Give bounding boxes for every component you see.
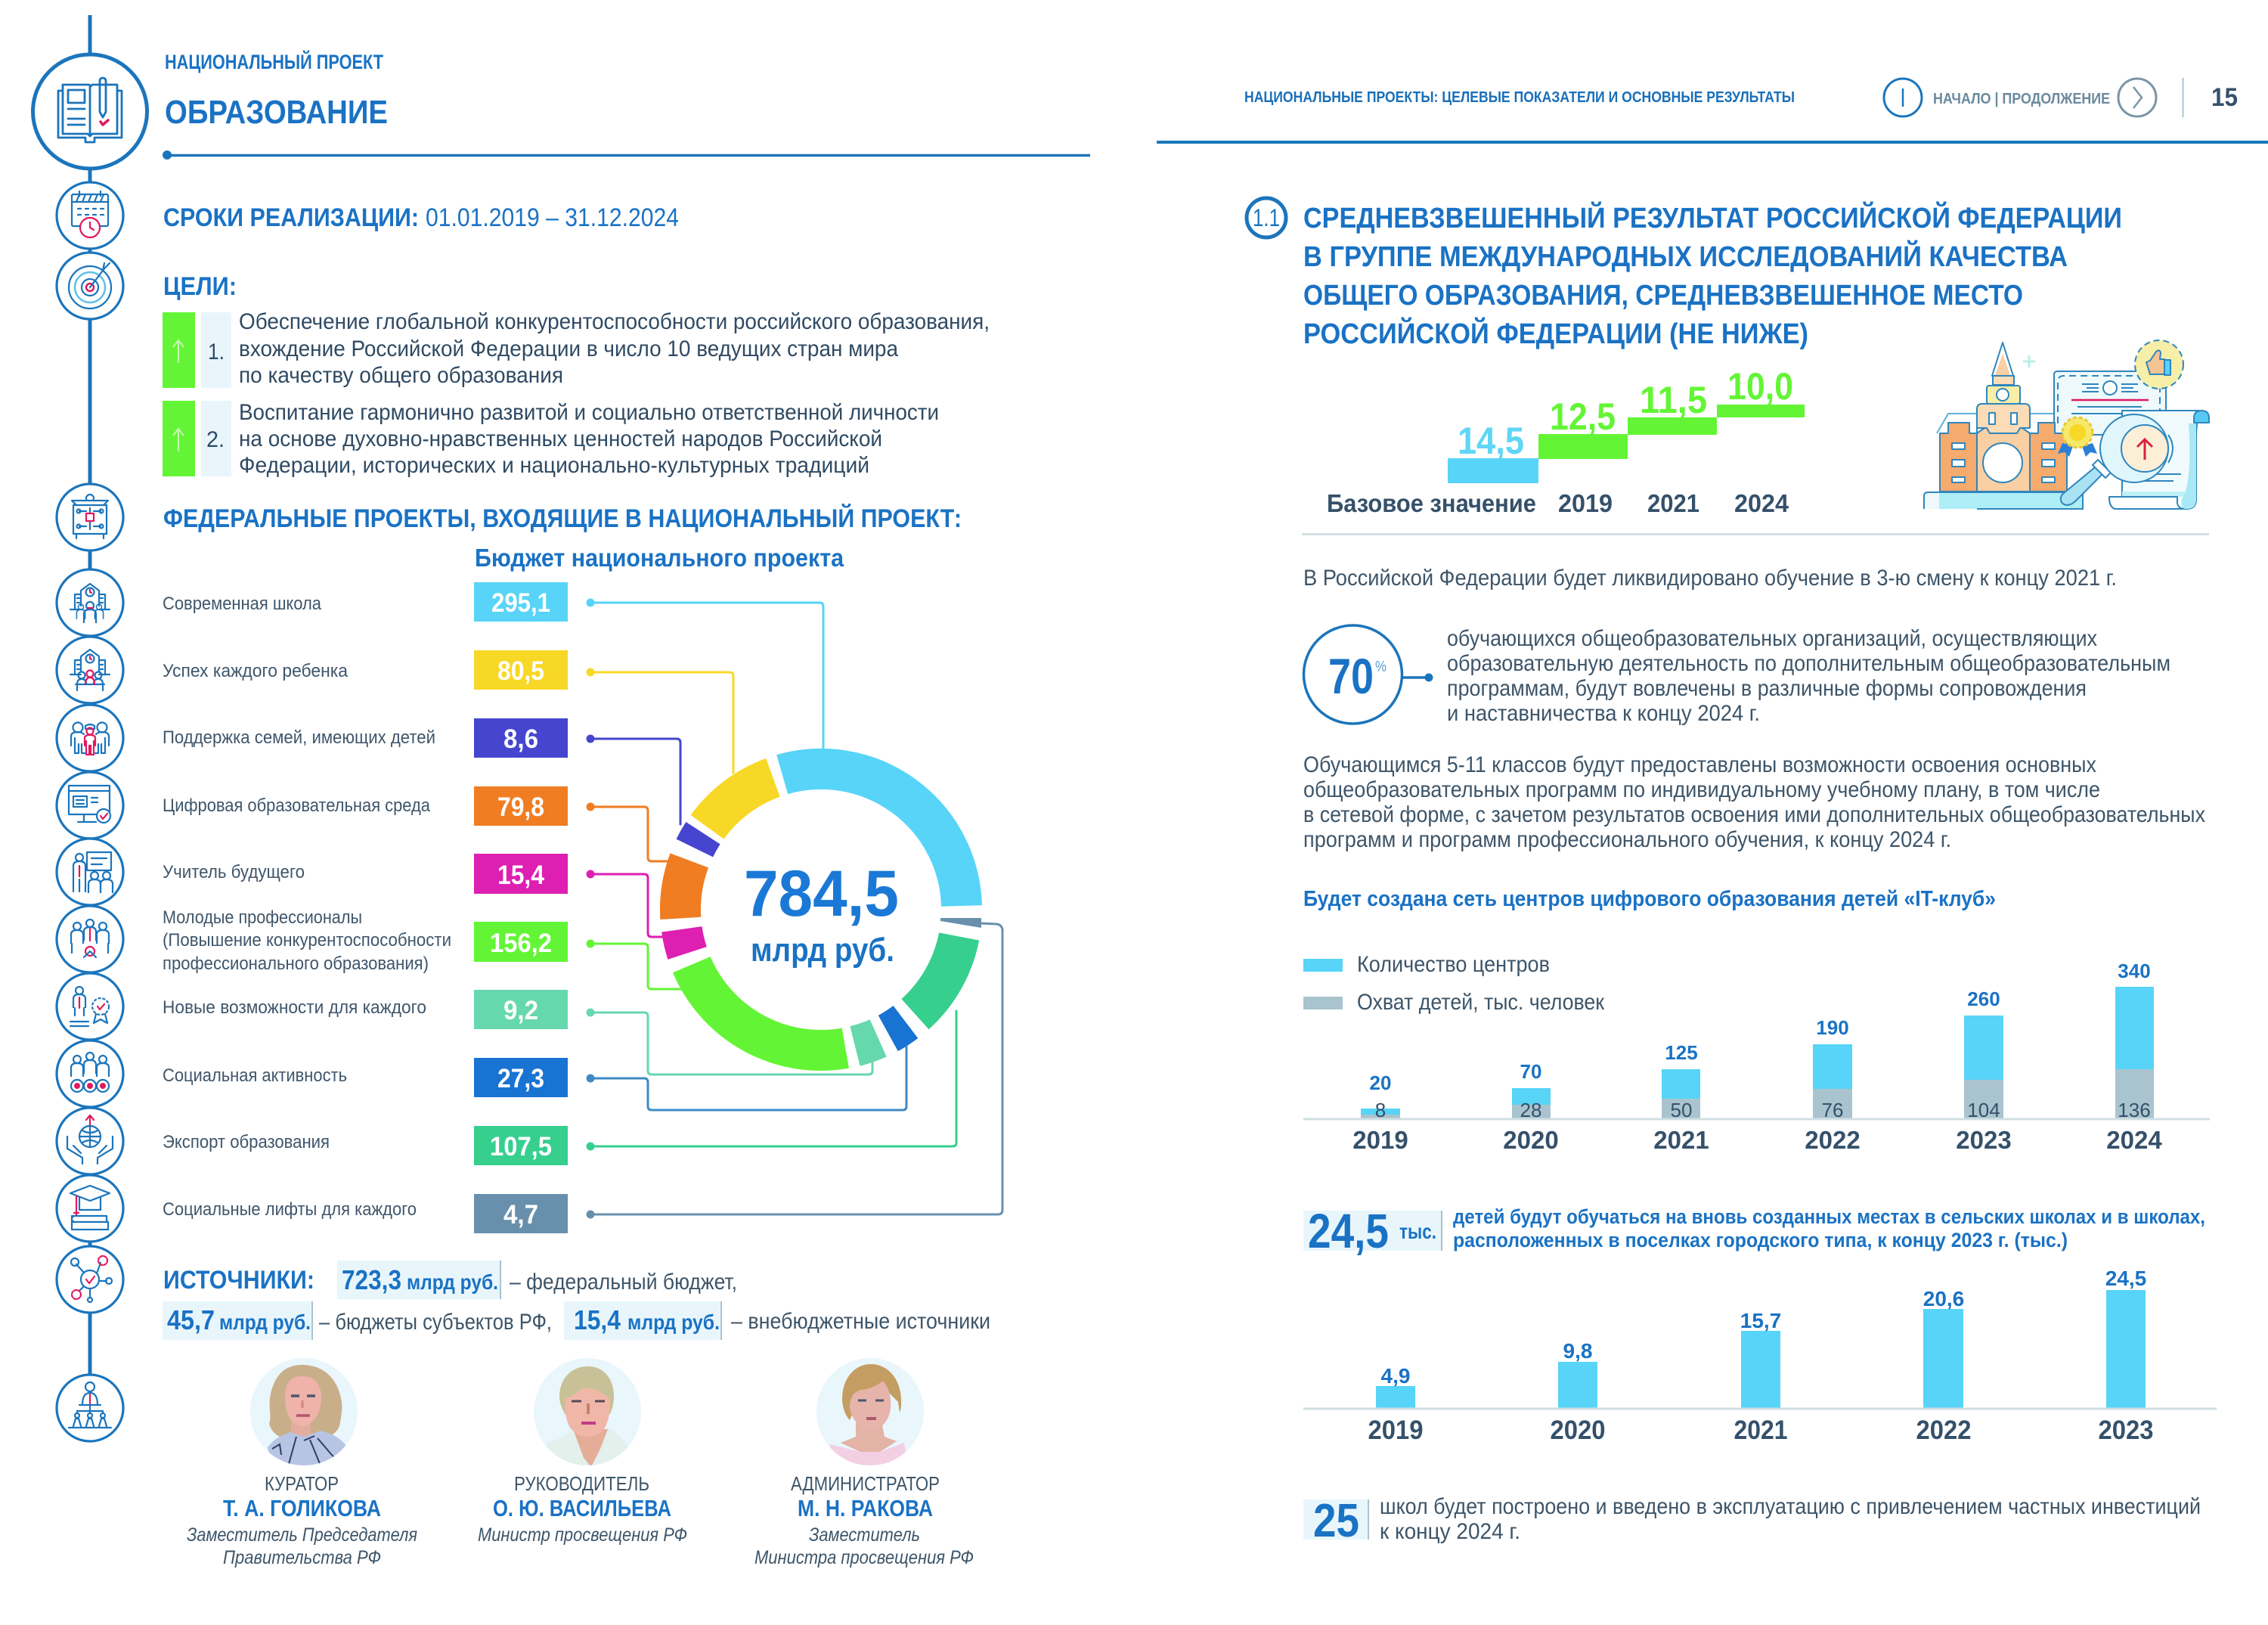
person: curator: КУРАТОР	[265, 1472, 339, 1495]
left wing	[1940, 423, 1977, 492]
right page header	[1157, 78, 2268, 142]
stair chart: rank: 10,0	[1727, 365, 1793, 408]
callout: 70 percent: %	[1375, 659, 1387, 675]
seal	[2058, 417, 2097, 457]
thumb badge	[2135, 340, 2183, 389]
legend: IT clubs: Количество центров	[1357, 952, 1550, 977]
person: administrator: Заместитель	[809, 1524, 920, 1546]
icon: next	[2118, 79, 2156, 116]
goal 1: по качеству общего образования	[239, 363, 563, 388]
source: federal budget: млрд руб.	[407, 1270, 498, 1294]
budget value tiles: 156,2	[490, 929, 552, 958]
person: head: О. Ю. ВАСИЛЬЕВА	[493, 1495, 671, 1521]
project label: social activity: Социальная активность	[163, 1065, 347, 1086]
source: non-budget: млрд руб.	[627, 1310, 720, 1334]
bar chart: IT clubs: 260	[1967, 988, 2000, 1010]
person: administrator	[754, 1472, 974, 1568]
text: individual curriculum: Обучающимся 5-11 классов будут предоставлены возможности освоения основных	[1303, 752, 2096, 777]
bar chart: IT clubs: 2020	[1503, 1126, 1559, 1154]
goal 2: Федерации, исторических и национально-культурных традиций	[239, 453, 869, 478]
stair chart: rank: 12,5	[1550, 395, 1616, 438]
bar chart: rural school places	[1303, 1267, 2217, 1445]
bar chart: IT clubs	[1303, 960, 2210, 1154]
bar chart: IT clubs: 190	[1816, 1016, 1849, 1039]
title: ОБРАЗОВАНИЕ	[165, 94, 388, 131]
bar chart: rural school places: 15,7	[1740, 1309, 1781, 1332]
donut chart: budget by project	[680, 769, 981, 1050]
icon: sources network	[57, 1246, 123, 1313]
source: regional budgets	[163, 1301, 552, 1340]
indicator title: СРЕДНЕВЗВЕШЕННЫЙ РЕЗУЛЬТАТ РОССИЙСКОЙ ФЕДЕРАЦИИ	[1303, 200, 2122, 234]
title rule	[163, 150, 1090, 160]
central block	[1977, 343, 2030, 492]
person: head: Министр просвещения РФ	[478, 1524, 687, 1546]
project label: young professionals: Молодые профессионалы	[163, 907, 362, 928]
bar chart: IT clubs: 8	[1375, 1099, 1386, 1121]
bar chart: IT clubs: 125	[1665, 1041, 1698, 1064]
callout: 24.5 thousand	[1303, 1204, 2205, 1258]
bar chart: IT clubs: 2022	[1805, 1126, 1861, 1154]
icon: social activity	[57, 1040, 123, 1107]
callout: 24.5 thousand: 24,5	[1308, 1204, 1389, 1258]
source: non-budget	[564, 1301, 990, 1340]
segment: child success	[708, 777, 773, 827]
legend: IT clubs: Охват детей, тыс. человек	[1357, 990, 1605, 1015]
building roofline	[1937, 414, 2056, 433]
scroll	[2109, 411, 2209, 509]
icon: digital monitor	[57, 772, 123, 839]
stair chart: rank: 2021	[1647, 489, 1699, 517]
indicator title	[1303, 200, 2122, 350]
connector lines from tiles to donut	[587, 599, 1002, 1219]
bar chart: rural school places: 9,8	[1563, 1339, 1592, 1363]
segment: young professionals	[692, 965, 845, 1050]
person: head: РУКОВОДИТЕЛЬ	[514, 1472, 649, 1495]
base	[1924, 492, 2083, 509]
bar chart: IT clubs: 20	[1370, 1071, 1391, 1094]
navigation label: НАЧАЛО | ПРОДОЛЖЕНИЕ	[1933, 91, 2110, 107]
goal 2	[163, 400, 939, 478]
project label: modern school: Современная школа	[163, 594, 322, 614]
callout: 24.5 thousand: тыс.	[1399, 1220, 1436, 1243]
person: curator: Т. А. ГОЛИКОВА	[223, 1495, 381, 1521]
icon: new opportunities	[57, 973, 123, 1040]
person: head	[478, 1472, 687, 1546]
budget value tiles: 107,5	[490, 1132, 552, 1161]
bar chart: IT clubs: 28	[1520, 1099, 1541, 1121]
bar chart: rural school places: 24,5	[2105, 1267, 2146, 1290]
stair chart: rank: 14,5	[1458, 420, 1524, 462]
donut centre total	[744, 857, 899, 969]
bar chart: rural school places: 2019	[1368, 1416, 1423, 1445]
segment: new opportunities	[855, 1038, 878, 1047]
source: federal budget: 723,3	[342, 1264, 401, 1295]
text: individual curriculum: общеобразовательных программ по индивидуальному учебному плану, в том числе	[1303, 777, 2100, 802]
bar chart: IT clubs: 70	[1520, 1060, 1541, 1083]
budget value tiles: 27,3	[497, 1064, 544, 1093]
bar chart: IT clubs: 2024	[2106, 1126, 2162, 1154]
budget value tiles: 80,5	[497, 656, 544, 686]
heading: budget: Бюджет национального проекта	[475, 544, 844, 572]
source: non-budget: – внебюджетные источники	[731, 1309, 990, 1334]
heading: terms: СРОКИ РЕАЛИЗАЦИИ:	[163, 203, 419, 232]
stair chart: rank: 2024	[1734, 489, 1789, 517]
source: regional budgets: – бюджеты субъектов РФ,	[319, 1310, 552, 1335]
bar chart: IT clubs: 104	[1967, 1099, 2000, 1121]
bar chart: rural school places: 2020	[1550, 1416, 1606, 1445]
person: administrator: М. Н. РАКОВА	[798, 1495, 933, 1521]
indicator badge 1.1	[1247, 198, 1286, 237]
icon: project board	[57, 484, 123, 550]
page number: 15	[2211, 83, 2238, 112]
source: regional budgets: млрд руб.	[219, 1310, 311, 1334]
segment: social lifts	[940, 918, 981, 928]
segment: export	[915, 936, 959, 1014]
project label: child success: Успех каждого ребенка	[163, 661, 349, 681]
icon: export hands	[57, 1108, 123, 1174]
heading: federal projects: ФЕДЕРАЛЬНЫЕ ПРОЕКТЫ, ВХОДЯЩИЕ В НАЦИОНАЛЬНЫЙ ПРОЕКТ:	[163, 504, 962, 533]
stair chart: rank: 2019	[1558, 489, 1613, 517]
goal 1: вхождение Российской Федерации в число 10 ведущих стран мира	[239, 336, 898, 361]
indicator title: РОССИЙСКОЙ ФЕДЕРАЦИИ (НЕ НИЖЕ)	[1303, 316, 1808, 350]
project label: family support: Поддержка семей, имеющих детей	[163, 727, 435, 748]
callout: 24.5 thousand: расположенных в поселках городского типа, к концу 2023 г. (тыс.)	[1453, 1229, 2068, 1251]
project label: new opportunities: Новые возможности для каждого	[163, 997, 426, 1018]
person: curator: Заместитель Председателя	[187, 1524, 417, 1546]
project label: young professionals: профессионального образования)	[163, 954, 429, 974]
bar chart: rural school places: 20,6	[1923, 1287, 1964, 1310]
icon: team hierarchy	[57, 1375, 123, 1441]
stair chart: rank: 11,5	[1640, 379, 1707, 421]
goal 1: Обеспечение глобальной конкурентоспособности российского образования,	[239, 309, 990, 334]
icon: start	[1884, 79, 1922, 116]
person: curator: Правительства РФ	[223, 1547, 381, 1568]
source: regional budgets: 45,7	[167, 1304, 215, 1335]
indicator title: В ГРУППЕ МЕЖДУНАРОДНЫХ ИССЛЕДОВАНИЙ КАЧЕСТВА	[1303, 239, 2068, 273]
icon: young professionals	[57, 906, 123, 972]
bar chart: rural school places: 2023	[2099, 1416, 2153, 1445]
project label: social lifts: Социальные лифты для каждого	[163, 1199, 417, 1220]
heading: goals: ЦЕЛИ:	[163, 272, 237, 301]
person: administrator: Министра просвещения РФ	[754, 1547, 974, 1568]
text: third shift: В Российской Федерации будет ликвидировано обучение в 3-ю смену к концу 2021 г.	[1303, 566, 2117, 591]
callout: 70 percent: программам, будут вовлечены в различные формы сопровождения	[1447, 676, 2087, 701]
certificate	[2054, 371, 2166, 435]
segment: digital environment	[680, 861, 689, 918]
magnifier	[2061, 414, 2168, 505]
icon: target	[57, 253, 123, 319]
bar chart: IT clubs: 2021	[1653, 1126, 1709, 1154]
stair chart: rank	[1327, 365, 1805, 517]
portrait: Golikova	[250, 1358, 358, 1465]
callout: 70 percent: и наставничества к концу 2024 г.	[1447, 701, 1760, 726]
callout: 70 percent: 70	[1328, 648, 1374, 704]
bar chart: IT clubs: 50	[1671, 1099, 1692, 1121]
sources block	[163, 1261, 990, 1340]
project label: teacher of the future: Учитель будущего	[163, 862, 305, 882]
legend: IT clubs	[1303, 952, 1605, 1015]
bar chart: IT clubs: 340	[2118, 960, 2151, 982]
goal 1	[163, 309, 990, 388]
callout: 25 schools	[1303, 1494, 2201, 1547]
bar chart: IT clubs: 2023	[1956, 1126, 2012, 1154]
callout: 25 schools: 25	[1313, 1495, 1359, 1547]
bar chart: IT clubs: 136	[2118, 1099, 2151, 1121]
heading: IT clubs: Будет создана сеть центров цифрового образования детей «IT-клуб»	[1303, 887, 1996, 911]
segment: teacher	[682, 929, 687, 953]
donut centre total: млрд руб.	[751, 932, 894, 969]
running title: НАЦИОНАЛЬНЫЕ ПРОЕКТЫ: ЦЕЛЕВЫЕ ПОКАЗАТЕЛИ И ОСНОВНЫЕ РЕЗУЛЬТАТЫ	[1244, 89, 1795, 106]
person: administrator: АДМИНИСТРАТОР	[791, 1472, 940, 1495]
goal 2: Воспитание гармонично развитой и социально ответственной личности	[239, 400, 939, 425]
goal 2: 2.	[206, 427, 225, 452]
icon: graduation cap and books	[57, 1175, 123, 1242]
text: individual curriculum: программ и программ профессионального обучения, к концу 2024 г.	[1303, 827, 1951, 852]
budget value tiles: 79,8	[497, 792, 544, 822]
budget value tiles: 295,1	[491, 588, 550, 618]
goal 2: на основе духовно-нравственных ценностей народов Российской	[239, 426, 882, 451]
goal 1: 1.	[208, 340, 225, 364]
eyebrow: national project: НАЦИОНАЛЬНЫЙ ПРОЕКТ	[165, 50, 383, 73]
icon: calendar	[57, 182, 123, 249]
right wing	[2030, 423, 2067, 492]
budget value tiles	[474, 582, 568, 1233]
project label: young professionals: (Повышение конкурентоспособности	[163, 930, 451, 951]
callout: 25 schools: к концу 2024 г.	[1380, 1519, 1520, 1544]
budget value tiles: 8,6	[503, 724, 538, 754]
icon: teacher	[57, 839, 123, 905]
portrait: Rakova	[816, 1358, 924, 1468]
donut centre total: 784,5	[744, 857, 899, 930]
bar chart: IT clubs: 2019	[1352, 1126, 1408, 1154]
dates: 01.01.2019 – 31.12.2024	[426, 203, 679, 232]
bar chart: rural school places: 2021	[1734, 1416, 1787, 1445]
segment: family support	[695, 833, 703, 848]
bar chart: IT clubs: 76	[1822, 1099, 1843, 1121]
callout: 70 percent: обучающихся общеобразовательных организаций, осуществляющих	[1447, 626, 2097, 651]
heading: sources: ИСТОЧНИКИ:	[163, 1266, 314, 1295]
plus mark	[2023, 355, 2035, 367]
bar chart: rural school places: 2022	[1916, 1416, 1972, 1445]
budget value tiles: 9,2	[503, 996, 538, 1025]
segment: social activity	[888, 1022, 906, 1033]
icon: family	[57, 705, 123, 771]
icon: school and child	[57, 637, 123, 703]
callout: 70 percent	[1303, 625, 2170, 726]
indicator title: ОБЩЕГО ОБРАЗОВАНИЯ, СРЕДНЕВЗВЕШЕННОЕ МЕСТО	[1303, 280, 2023, 312]
timeline spine	[88, 15, 92, 1408]
indicator badge 1.1: 1.1	[1253, 204, 1280, 231]
project label: education export: Экспорт образования	[163, 1132, 330, 1152]
icon: open book	[33, 54, 147, 169]
project label: digital environment: Цифровая образовательная среда	[163, 795, 431, 816]
text: individual curriculum	[1303, 752, 2205, 852]
budget value tiles: 15,4	[497, 861, 544, 890]
callout: 70 percent: образовательную деятельность по дополнительным общеобразовательным	[1447, 651, 2170, 676]
person: curator	[187, 1472, 417, 1568]
project label: young professionals	[163, 907, 451, 974]
source: federal budget	[337, 1261, 737, 1299]
portrait: Vasilyeva	[534, 1358, 641, 1468]
bar chart: rural school places: 4,9	[1381, 1364, 1410, 1388]
source: federal budget: – федеральный бюджет,	[510, 1270, 737, 1295]
illustration: university, certificate, magnifier	[1924, 340, 2209, 509]
segment: modern school	[782, 769, 962, 906]
wing windows	[1952, 443, 2055, 482]
stair chart: rank: Базовое значение	[1327, 489, 1536, 517]
budget value tiles: 4,7	[503, 1200, 538, 1230]
source: non-budget: 15,4	[574, 1304, 621, 1335]
icon: school and students	[57, 569, 123, 636]
